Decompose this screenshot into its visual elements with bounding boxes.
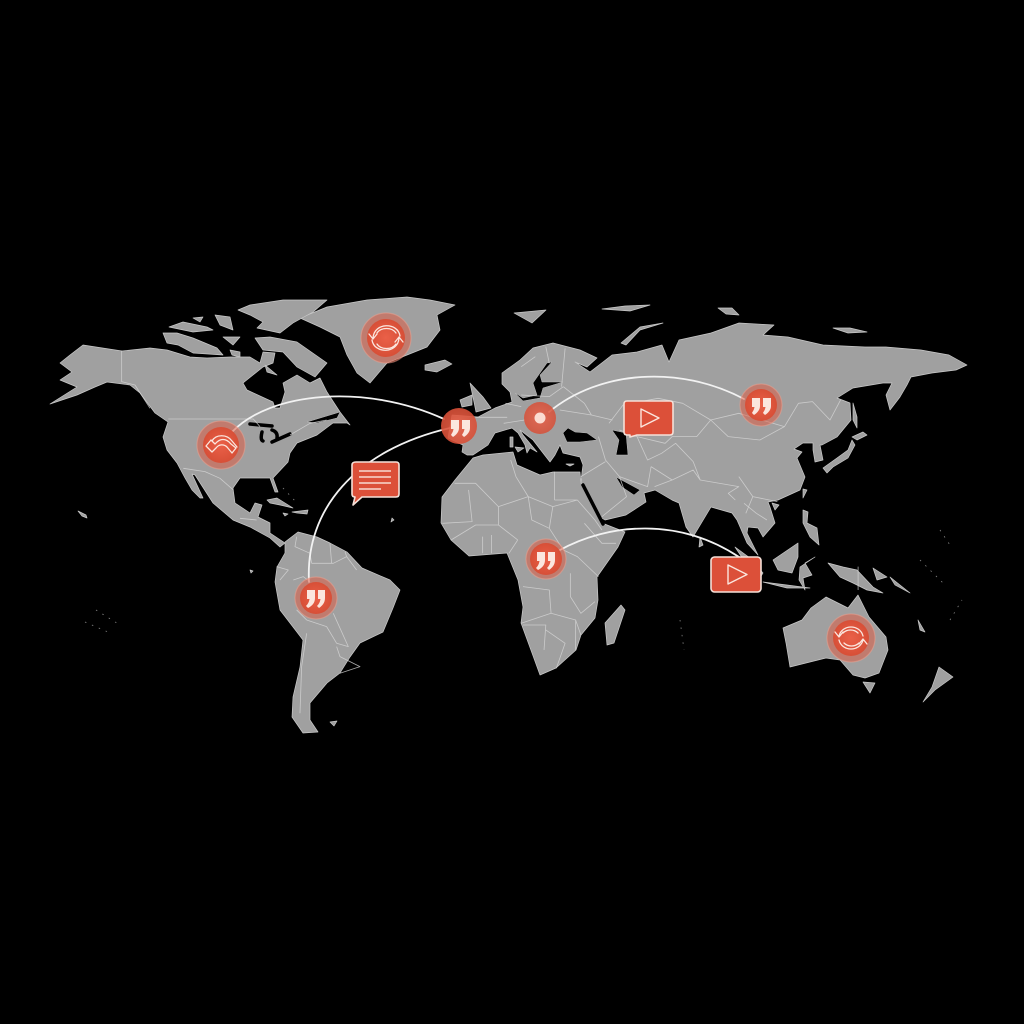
landmass: South America	[275, 532, 400, 733]
landmass: Maritime Southeast Asia	[735, 510, 925, 632]
landmass: Greenland	[300, 297, 455, 383]
arc: Central Africa to Southeast Asia	[558, 528, 739, 557]
scattered Pacific islands	[85, 488, 962, 650]
marker: North America swap arrows	[197, 421, 245, 469]
marker: South America quote	[295, 577, 337, 619]
world map landmasses	[50, 297, 967, 733]
callout: video card, Central Asia	[624, 401, 673, 437]
marker: Australia refresh	[827, 614, 875, 662]
landmass: Africa	[441, 452, 625, 675]
landmass: Tasmania and New Zealand	[863, 667, 953, 702]
arc: North America to Iberia	[232, 396, 444, 432]
landmass: Europe and Asia islands	[460, 305, 867, 547]
callout: message card	[352, 462, 399, 505]
landmass: Arctic islands	[163, 300, 452, 377]
marker: Central Africa quote	[526, 539, 566, 579]
landmass: Eurasia	[448, 323, 967, 555]
landmass: North America	[50, 345, 350, 547]
callout: video card, Southeast Asia	[711, 557, 761, 592]
inland seas	[250, 362, 640, 524]
country borders, west	[122, 351, 360, 713]
marker: Greenland refresh	[361, 313, 411, 363]
arc: Central Europe to Central Asia	[549, 377, 744, 412]
marker: Iberia quote	[441, 408, 477, 444]
landmass: Caribbean and small Atlantic islands	[78, 498, 394, 726]
landmass: Madagascar	[605, 605, 625, 645]
arc: South America to Iberia	[309, 428, 450, 582]
landmass: Australia	[783, 595, 888, 678]
country borders, east	[442, 347, 858, 668]
marker: Central Europe dot	[524, 402, 556, 434]
marker: Central Asia quote	[740, 384, 782, 426]
